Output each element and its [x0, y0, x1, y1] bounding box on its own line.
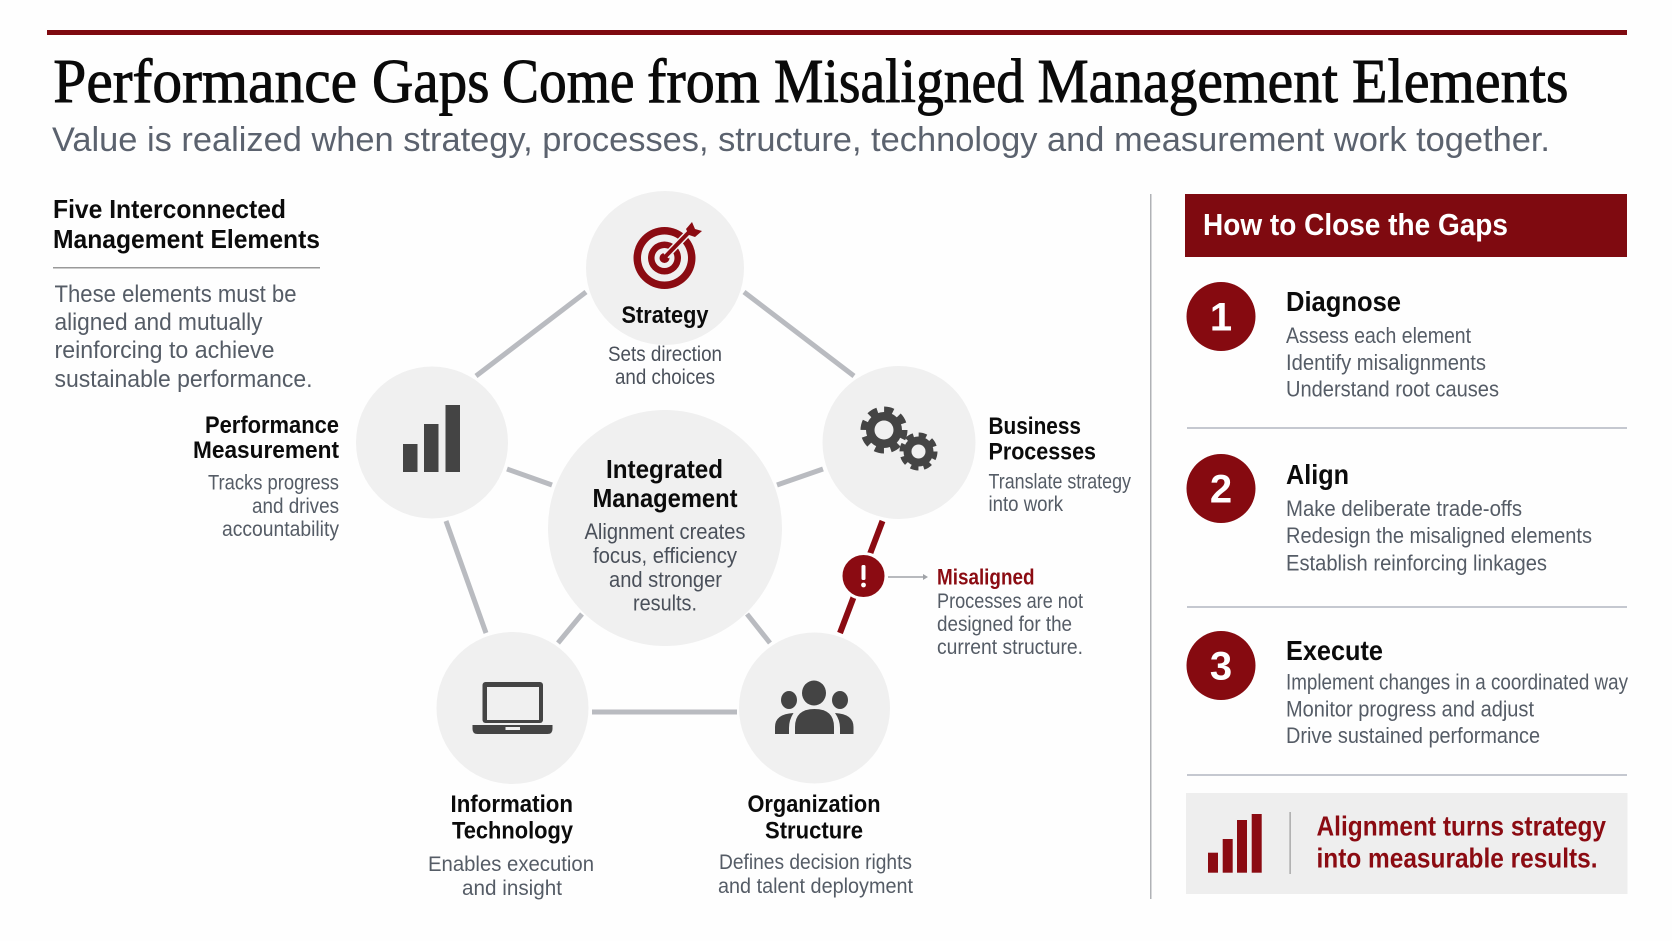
icon: bar chart: [403, 405, 460, 472]
center heading: Integrated: [606, 454, 723, 484]
organization description: Defines decision rights: [719, 851, 912, 874]
title: Come: [502, 48, 634, 116]
icon: people: [775, 680, 854, 734]
title: Misaligned: [774, 48, 1024, 116]
intro text: aligned and mutually: [54, 309, 262, 336]
step 1: diagnose: [1186, 282, 1499, 402]
node: information technology: [428, 632, 594, 900]
step 1: diagnose: Diagnose: [1286, 286, 1401, 317]
strategy description: Sets direction: [608, 343, 722, 366]
panel header: How to Close the Gaps: [1203, 207, 1508, 242]
intro text: reinforcing to achieve: [54, 337, 274, 364]
business description: Translate strategy: [988, 470, 1131, 494]
step 3: execute: 3: [1210, 644, 1232, 688]
step 1: diagnose: Understand root causes: [1286, 376, 1499, 402]
panel header: [1185, 194, 1627, 257]
icon: target: [634, 222, 702, 289]
panel: five elements intro: [53, 194, 320, 393]
IT description: Enables execution: [428, 853, 594, 876]
misaligned description: designed for the: [937, 613, 1072, 636]
center description: [584, 519, 746, 616]
performance label: Measurement: [193, 437, 339, 464]
misaligned label: Misaligned: [937, 564, 1034, 590]
step 2: align: 2: [1210, 468, 1232, 512]
center heading: Management: [592, 483, 738, 513]
node: organization structure: [718, 632, 913, 898]
performance label: [193, 412, 339, 464]
step 2: align: Align: [1286, 459, 1349, 490]
business description: [988, 470, 1131, 516]
top rule: [47, 30, 1627, 35]
step 1: diagnose: Assess each element: [1286, 323, 1471, 348]
business label: [988, 413, 1096, 466]
node: business processes: [822, 366, 1131, 519]
step 3: execute: [1186, 631, 1628, 748]
step 1: diagnose: 1: [1210, 296, 1232, 340]
center description: and stronger: [609, 567, 722, 592]
center description: Alignment creates: [584, 519, 746, 544]
step 3: execute: Execute: [1286, 635, 1383, 666]
step 2: align: Establish reinforcing linkages: [1286, 550, 1547, 576]
node: strategy: [586, 191, 744, 389]
intro text: These elements must be: [54, 281, 296, 308]
node: integrated management: [548, 410, 782, 646]
title: Performance: [53, 48, 357, 116]
title: from: [647, 48, 760, 116]
intro text: [54, 281, 312, 393]
step 3: execute: Drive sustained performance: [1286, 723, 1540, 748]
organization description: and talent deployment: [718, 875, 913, 898]
subtitle: Value is realized when strategy, processes, structure, technology and measurement work together.: [52, 121, 1550, 159]
icon: gears: [864, 410, 934, 468]
organization label: Organization: [748, 791, 880, 818]
misaligned description: Processes are not: [937, 590, 1083, 613]
organization description: [718, 851, 913, 898]
misaligned connector: [840, 521, 882, 633]
title: Gaps: [372, 48, 490, 116]
icon: laptop: [472, 682, 552, 734]
intro heading: Five Interconnected: [53, 194, 286, 224]
IT label: Information: [450, 791, 573, 818]
IT description: [428, 853, 594, 900]
center description: results.: [633, 590, 697, 616]
intro heading: Management Elements: [53, 224, 320, 254]
callout: [1186, 793, 1628, 894]
step 1: diagnose: Identify misalignments: [1286, 350, 1486, 375]
node: performance measurement: [193, 366, 508, 541]
step 2: align: Redesign the misaligned elements: [1286, 523, 1592, 548]
title: Management: [1038, 48, 1338, 116]
business label: Processes: [988, 438, 1096, 466]
IT label: [450, 791, 574, 844]
callout text: into measurable results.: [1316, 842, 1598, 874]
icon: rising bars: [1208, 814, 1262, 873]
performance label: Performance: [205, 412, 339, 439]
misalignment alert: [841, 554, 1083, 659]
misaligned description: current structure.: [937, 636, 1083, 659]
performance description: and drives: [252, 495, 339, 518]
arrow: [888, 574, 928, 580]
organization label: [748, 791, 880, 844]
center heading: [592, 454, 738, 513]
performance description: accountability: [222, 518, 339, 541]
performance description: [208, 472, 339, 541]
step 3: execute: Monitor progress and adjust: [1286, 696, 1534, 722]
organization label: Structure: [765, 818, 863, 844]
callout text: [1316, 810, 1606, 874]
strategy description: [608, 343, 722, 389]
panel: how to close the gaps: [1185, 194, 1628, 894]
misaligned description: [937, 590, 1083, 659]
callout text: Alignment turns strategy: [1316, 810, 1606, 842]
step 2: align: Make deliberate trade-offs: [1286, 496, 1522, 521]
performance description: Tracks progress: [208, 472, 339, 494]
IT description: and insight: [462, 877, 562, 900]
icon: alert badge: [841, 554, 886, 598]
business description: into work: [988, 493, 1063, 516]
diagram: connector lines: [446, 292, 854, 712]
intro heading: [53, 194, 320, 254]
strategy description: and choices: [615, 366, 715, 389]
strategy label: Strategy: [622, 302, 709, 329]
business label: Business: [988, 413, 1081, 440]
step 2: align: [1186, 454, 1592, 576]
intro text: sustainable performance.: [54, 366, 312, 393]
title: Elements: [1352, 48, 1568, 116]
IT label: Technology: [452, 818, 574, 844]
center description: focus, efficiency: [593, 543, 737, 568]
